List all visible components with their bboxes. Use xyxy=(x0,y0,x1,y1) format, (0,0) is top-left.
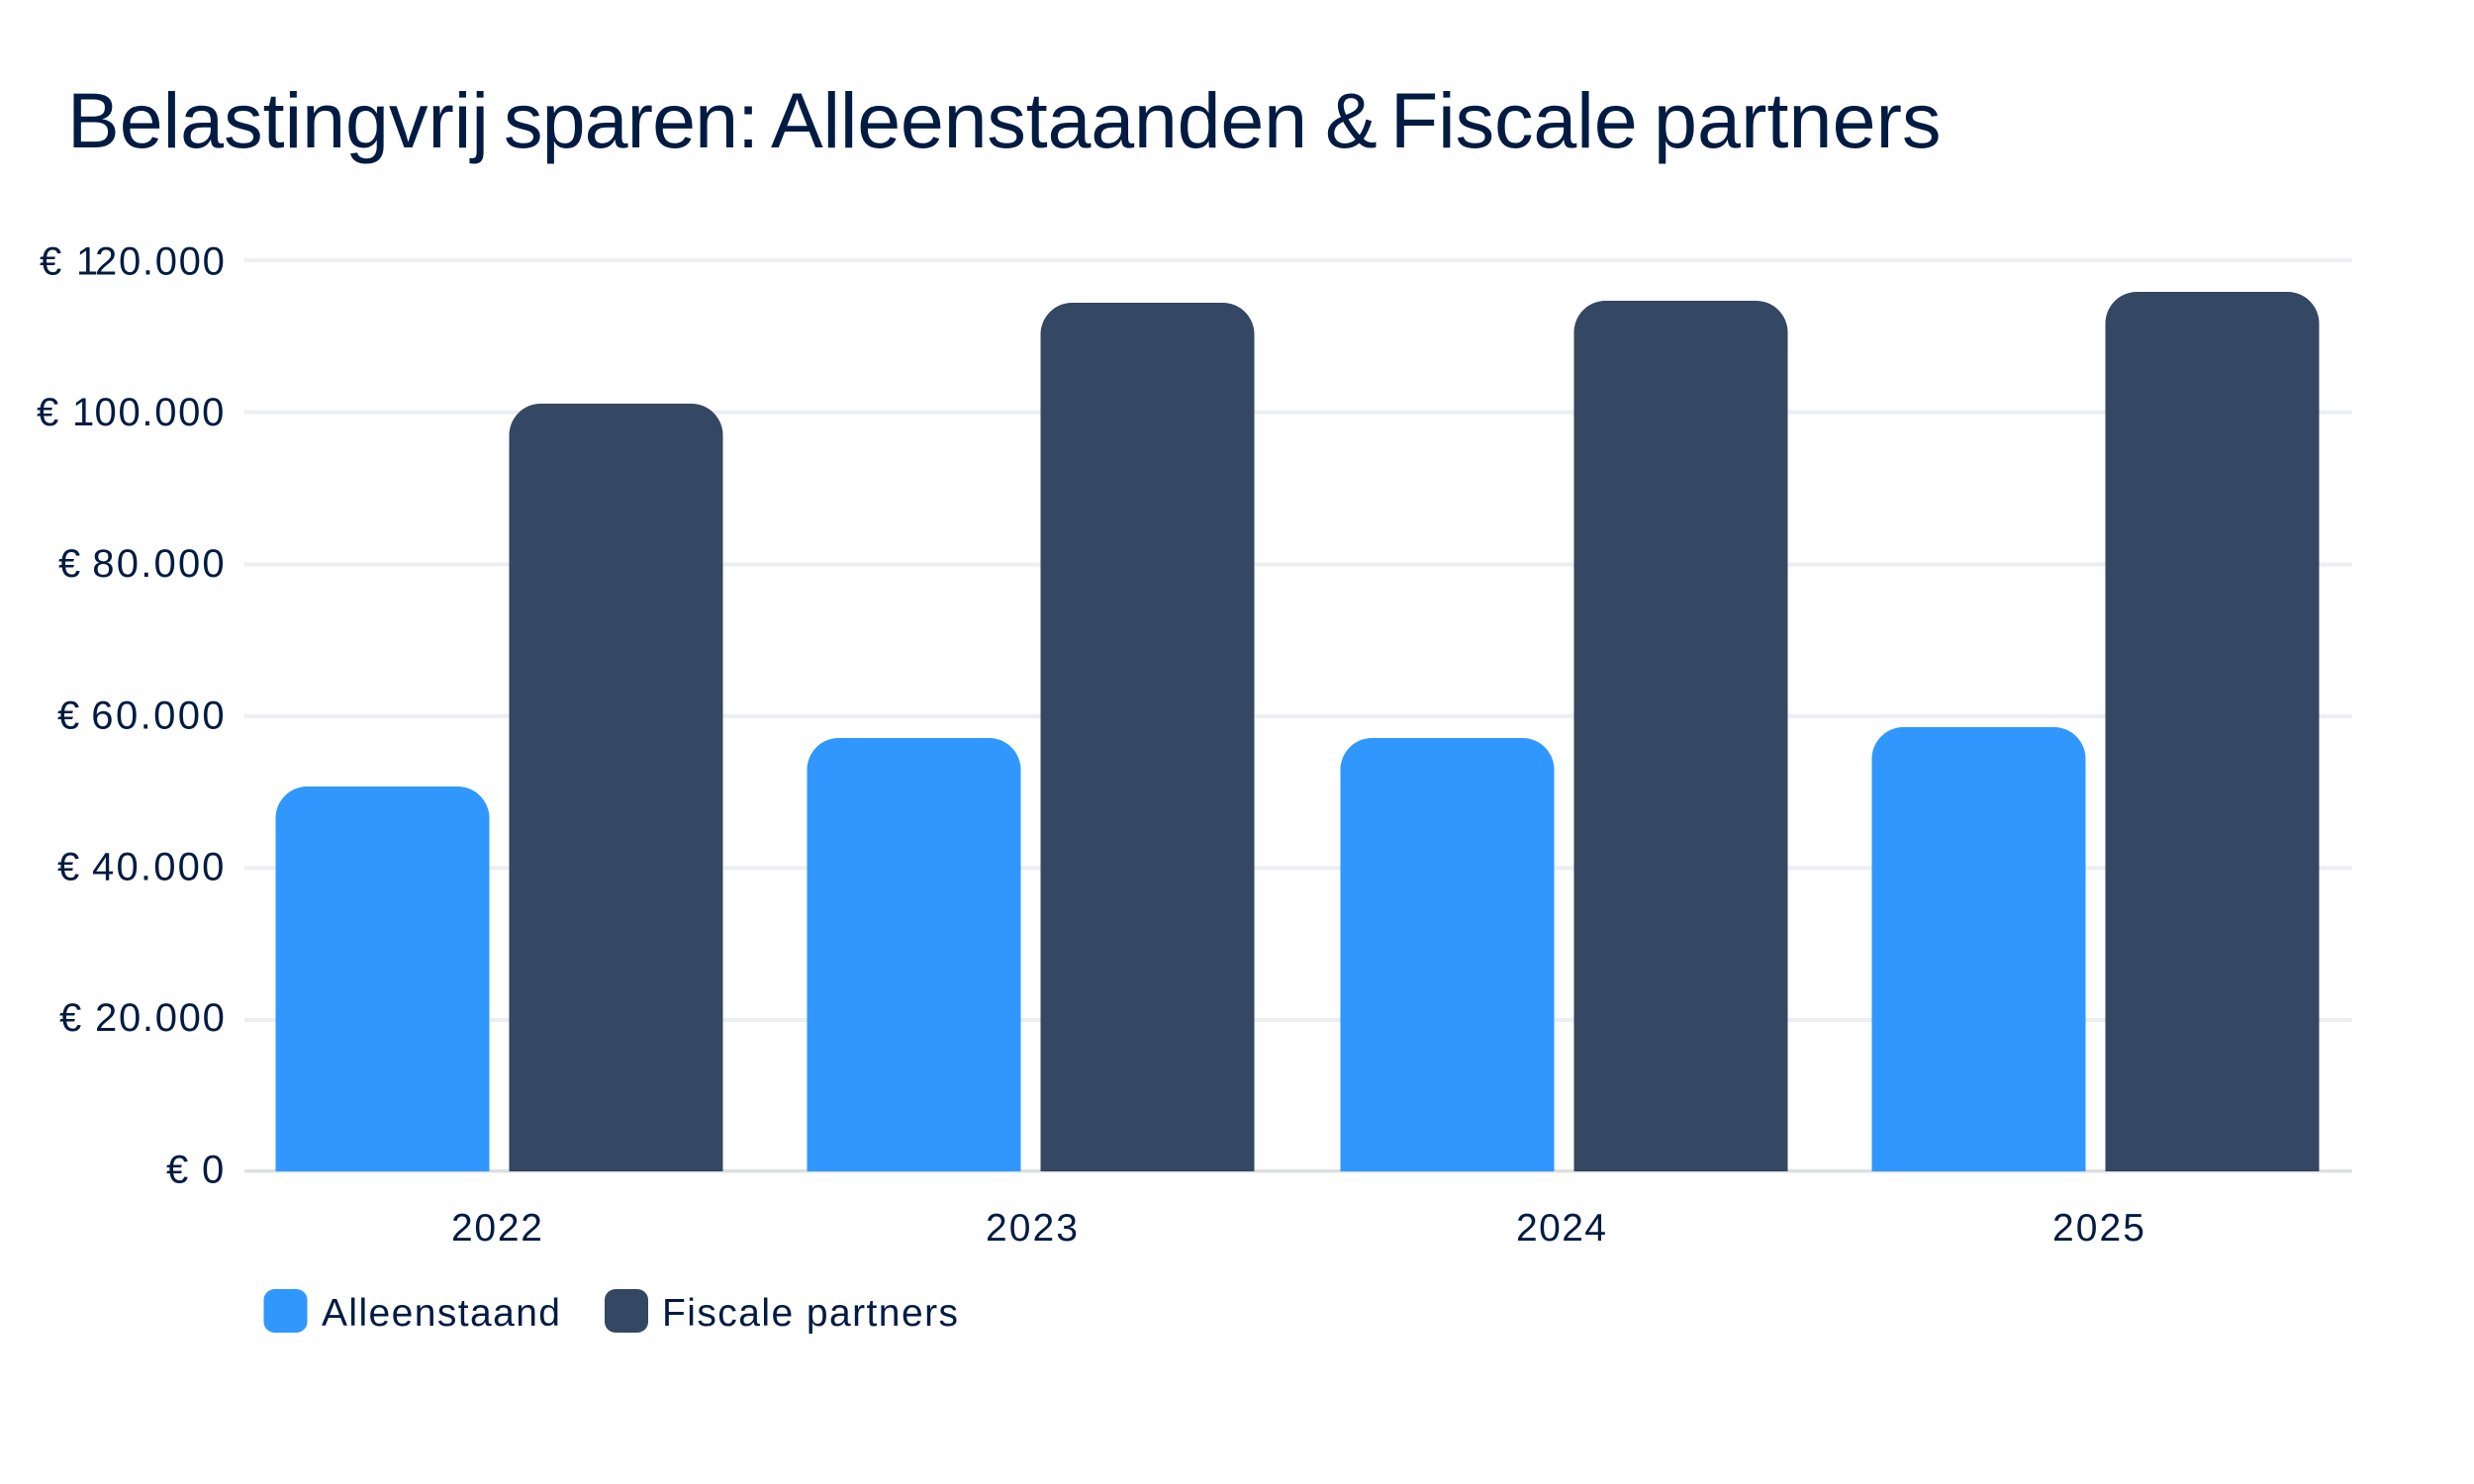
title: sparen: xyxy=(504,76,779,164)
y-axis labels: € xyxy=(40,239,72,283)
bar chart xyxy=(37,239,2352,1250)
legend item: Fiscale partners: Fiscale partners xyxy=(662,1292,958,1335)
y-axis labels: 1 xyxy=(72,391,94,434)
y-axis labels: 60.000 xyxy=(91,695,227,738)
y-axis labels: € xyxy=(57,695,90,738)
title: Fiscale xyxy=(1390,76,1659,164)
y-axis labels: 00.000 xyxy=(95,391,226,434)
bars: 2025 xyxy=(1872,292,2320,1171)
x-axis labels: 2024 xyxy=(1516,1207,1606,1250)
y-axis labels: 80.000 xyxy=(92,542,227,586)
y-axis labels: € xyxy=(37,391,69,434)
y-axis labels: 1 xyxy=(76,239,98,283)
y-axis labels: € xyxy=(166,1148,199,1191)
y-axis labels xyxy=(37,239,227,1191)
y-axis labels: € xyxy=(57,845,90,888)
title: Belastingvrij xyxy=(67,76,511,164)
x-axis labels xyxy=(451,1207,2144,1250)
y-axis labels: 20.000 xyxy=(95,996,227,1040)
title: & xyxy=(1325,76,1399,164)
title: partners xyxy=(1654,76,1942,164)
legend item: Alleenstaand: Alleenstaand xyxy=(322,1292,560,1335)
y-axis labels: € xyxy=(59,996,92,1040)
y-axis labels: 40.000 xyxy=(92,845,227,888)
title: Alleenstaanden xyxy=(771,76,1329,164)
y-axis labels: € xyxy=(58,542,91,586)
bars: 2024 xyxy=(1340,301,1787,1171)
bars: 2022 xyxy=(275,404,722,1171)
y-axis labels: 20.000 xyxy=(95,239,227,283)
x-axis labels: 2025 xyxy=(2052,1207,2144,1250)
x-axis labels: 2023 xyxy=(986,1207,1078,1250)
legend xyxy=(263,1289,958,1335)
bars: 2023 xyxy=(808,303,1255,1171)
x-axis labels: 2022 xyxy=(451,1207,542,1250)
y-axis labels: 0 xyxy=(202,1148,224,1191)
